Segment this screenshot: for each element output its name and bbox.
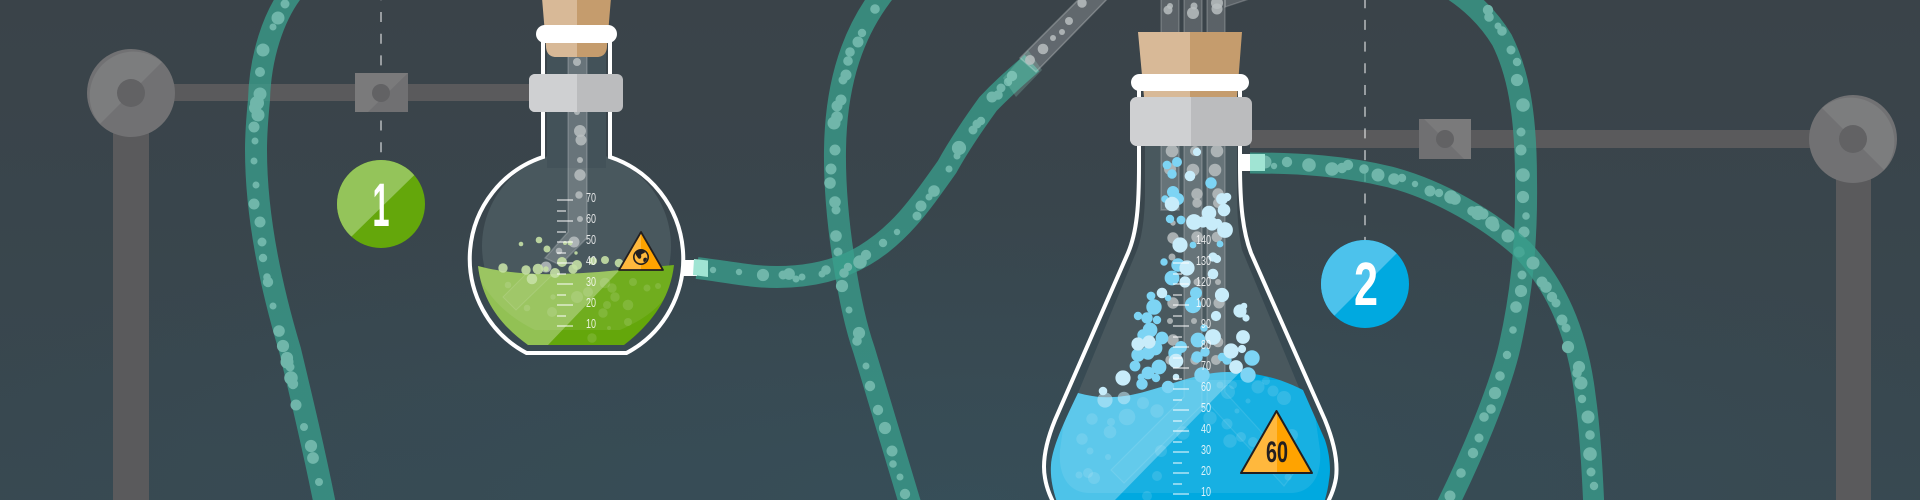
flask 2 measuring scale: 80 (1201, 337, 1211, 352)
hose: flask 2 outlet (1250, 156, 1598, 500)
flask 1 glass tube (545, 50, 587, 265)
flask 2 (1040, 0, 1337, 500)
flask 1 glass interior (482, 43, 671, 340)
flask 1 green bubbles (498, 237, 623, 284)
hose: far left loop (249, 0, 326, 500)
flask 2 pale bubbles (1098, 148, 1249, 407)
hose: flask 1 to flask 2 (697, 63, 1032, 282)
badge 2 (1321, 240, 1409, 328)
dashed leader line 2 (1364, 0, 1366, 240)
flask 1 white collar (536, 25, 617, 43)
flask 1 measuring scale: 50 (586, 232, 596, 247)
flask 1 hazard triangle with globe icon (619, 232, 663, 270)
right support stand (1250, 95, 1897, 500)
flask 2 blue liquid (1050, 372, 1330, 500)
flask 1 cork (542, 0, 611, 57)
flask 2 measuring scale: 60 (1201, 379, 1211, 394)
flask 2 measuring scale: 100 (1196, 295, 1211, 310)
flask 1 measuring scale: 20 (586, 295, 596, 310)
flask 2 measuring scale (1173, 232, 1211, 499)
flask 2 blue bubbles (1130, 158, 1259, 392)
flask 1 outlet connector (683, 259, 708, 277)
flask 2 measuring scale: 130 (1196, 253, 1211, 268)
left clamp (355, 73, 408, 112)
flask 1 outline (470, 40, 683, 353)
flask 1 (470, 0, 708, 353)
flask 2 measuring scale: 50 (1201, 400, 1211, 415)
flask 1 green liquid (478, 265, 674, 345)
dashed leader line 1 (380, 0, 382, 161)
flask 2 cork (1138, 32, 1242, 97)
left support stand (87, 49, 531, 500)
flask 1 measuring scale: 40 (586, 253, 596, 268)
flask 2 measuring scale: 20 (1201, 463, 1211, 478)
flask 1 grey clamp (529, 74, 623, 112)
flask 2 measuring scale: 120 (1196, 274, 1211, 289)
badge 2: 2 (1354, 250, 1378, 318)
flask 2 outlet connector (1240, 154, 1265, 171)
flask 2 grey bubbles (1164, 0, 1224, 365)
flask 1 grey bubbles (540, 58, 586, 272)
flask 2 measuring scale: 40 (1201, 421, 1211, 436)
flask 2 grey clamp (1130, 97, 1252, 146)
diagonal glass inlet tube (1003, 0, 1112, 97)
flask 1 measuring scale: 30 (586, 274, 596, 289)
flask 2 glass interior (1058, 90, 1325, 500)
flask 2 measuring scale: 10 (1201, 484, 1211, 499)
hose: centre vertical loop (825, 0, 912, 500)
flask 2 hazard triangle with 60: 60 (1266, 436, 1288, 469)
badge 1: 1 (372, 171, 390, 239)
flask 2 outline (1044, 85, 1337, 500)
flask 1 measuring scale: 60 (586, 211, 596, 226)
right clamp (1419, 119, 1471, 159)
flask 2 glass tubes (1161, 0, 1252, 405)
flask 1 measuring scale: 70 (586, 190, 596, 205)
flask 1 measuring scale: 10 (586, 316, 596, 331)
flask 2 measuring scale: 70 (1201, 358, 1211, 373)
badge 1 (337, 160, 425, 248)
hose: right vertical loop (1440, 0, 1529, 500)
flask 2 measuring scale: 140 (1196, 232, 1211, 247)
flask 2 measuring scale: 90 (1201, 316, 1211, 331)
flask 2 measuring scale: 30 (1201, 442, 1211, 457)
flask 2 hazard triangle with 60 (1241, 411, 1312, 473)
flask 1 measuring scale (557, 190, 596, 331)
flask 2 white collar (1131, 74, 1249, 91)
